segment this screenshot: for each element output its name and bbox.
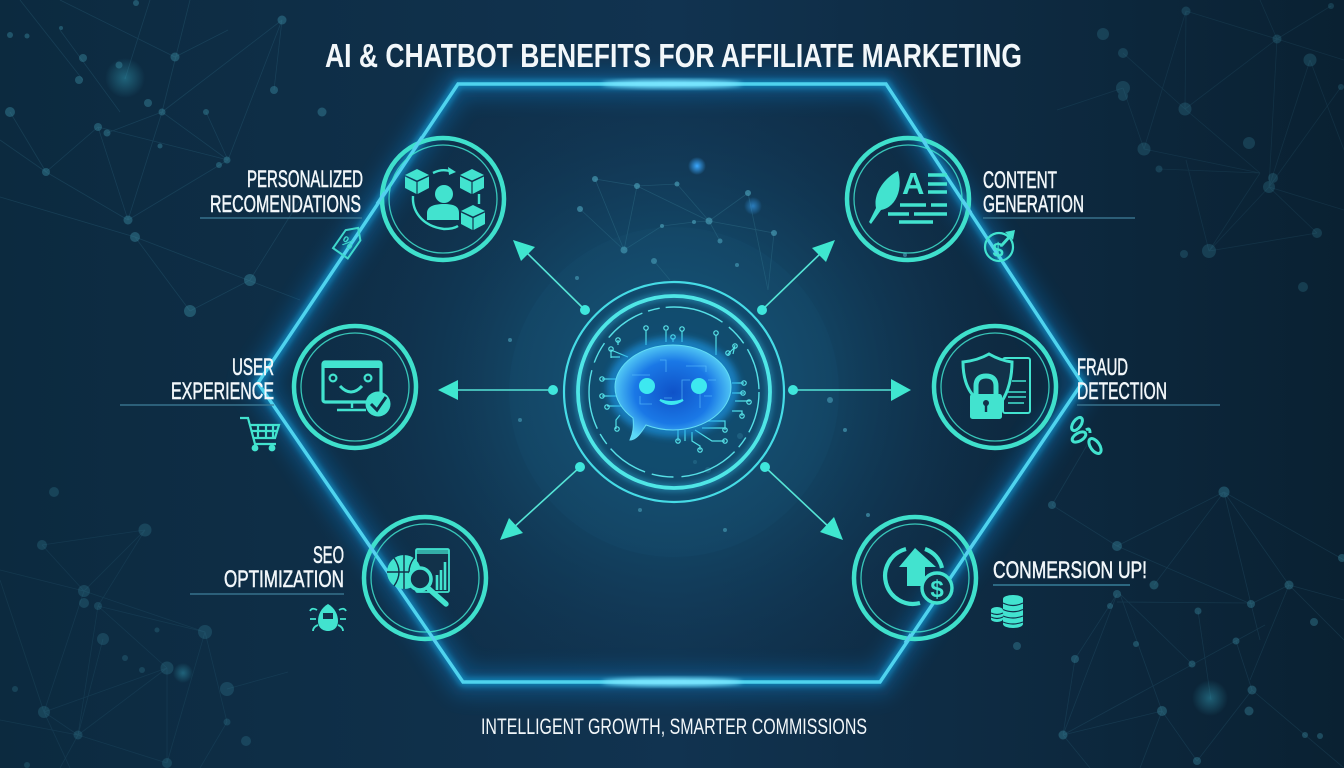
background network: centre xyxy=(508,157,907,532)
icon: price tag xyxy=(333,223,366,258)
label: conversion up: CONMERSION UP! xyxy=(993,557,1147,584)
icon: globe, chart and magnifier xyxy=(387,549,449,604)
node: conversion up xyxy=(854,517,976,639)
label: seo optimization xyxy=(190,542,344,594)
label: content generation: CONTENT xyxy=(983,167,1057,194)
hub rings xyxy=(564,282,784,502)
icon: cubes and user xyxy=(405,167,485,230)
background network: top left xyxy=(0,0,326,317)
label: seo optimization: OPTIMIZATION xyxy=(224,566,344,593)
arrow: to content generation xyxy=(757,240,835,315)
label: user experience: USER xyxy=(232,354,274,381)
background network: bottom right xyxy=(1013,440,1344,768)
label: content generation xyxy=(983,167,1135,218)
icon: bug xyxy=(310,604,346,631)
bubble inner circuitry xyxy=(632,360,716,408)
icon: broken chain xyxy=(1069,416,1104,456)
icon: dollar growth xyxy=(985,230,1015,262)
arrow: to personalized recommendations xyxy=(513,240,590,315)
node: fraud detection xyxy=(934,326,1056,448)
smile xyxy=(660,400,683,404)
node: user experience xyxy=(294,326,416,448)
label: personalized recommendations: PERSONALIZED xyxy=(247,166,363,193)
node: personalized recommendations xyxy=(382,138,504,260)
label: user experience: EXPERIENCE xyxy=(171,378,274,405)
background network: bottom left xyxy=(0,487,288,768)
arrow: to conversion xyxy=(760,462,843,540)
tagline: INTELLIGENT GROWTH, SMARTER COMMISSIONS xyxy=(481,714,867,739)
icon: smiling monitor with check xyxy=(323,361,390,416)
icon: coin stacks xyxy=(991,595,1023,628)
chat bubble xyxy=(615,345,731,440)
icon: price tag: % xyxy=(338,233,358,253)
icon: shield, padlock and document xyxy=(963,354,1030,419)
central chatbot hub xyxy=(509,227,839,557)
label: personalized recommendations: RECOMENDATIONS xyxy=(210,191,361,218)
icon: shopping cart xyxy=(240,418,279,451)
background network: top right xyxy=(1057,0,1344,292)
icon: dollar growth: $ xyxy=(992,240,1004,262)
label: content generation: GENERATION xyxy=(983,191,1084,218)
arrow: to seo optimization xyxy=(500,462,585,540)
label: fraud detection: FRAUD xyxy=(1077,354,1128,381)
hub circuit traces xyxy=(600,326,751,452)
hexagon crossings over rings xyxy=(367,134,975,644)
label: seo optimization: SEO xyxy=(313,542,344,569)
icon: up arrow with dollar coin: $ xyxy=(930,576,944,603)
arrow: to user experience xyxy=(438,380,558,400)
node: content generation xyxy=(847,138,969,260)
hexagon frame xyxy=(258,80,1082,686)
label: personalized recommendations xyxy=(200,166,363,218)
chat bubble glow xyxy=(607,337,739,437)
node: seo optimization xyxy=(364,517,486,639)
title: AI & CHATBOT BENEFITS FOR AFFILIATE MARKETING xyxy=(325,37,1022,74)
icon: quill and document text: A xyxy=(902,166,924,201)
label: user experience xyxy=(120,354,274,405)
eyes xyxy=(639,378,707,394)
label: fraud detection: DETECTION xyxy=(1077,378,1167,405)
arrow: to fraud detection xyxy=(788,379,911,401)
label: fraud detection xyxy=(1077,354,1220,405)
